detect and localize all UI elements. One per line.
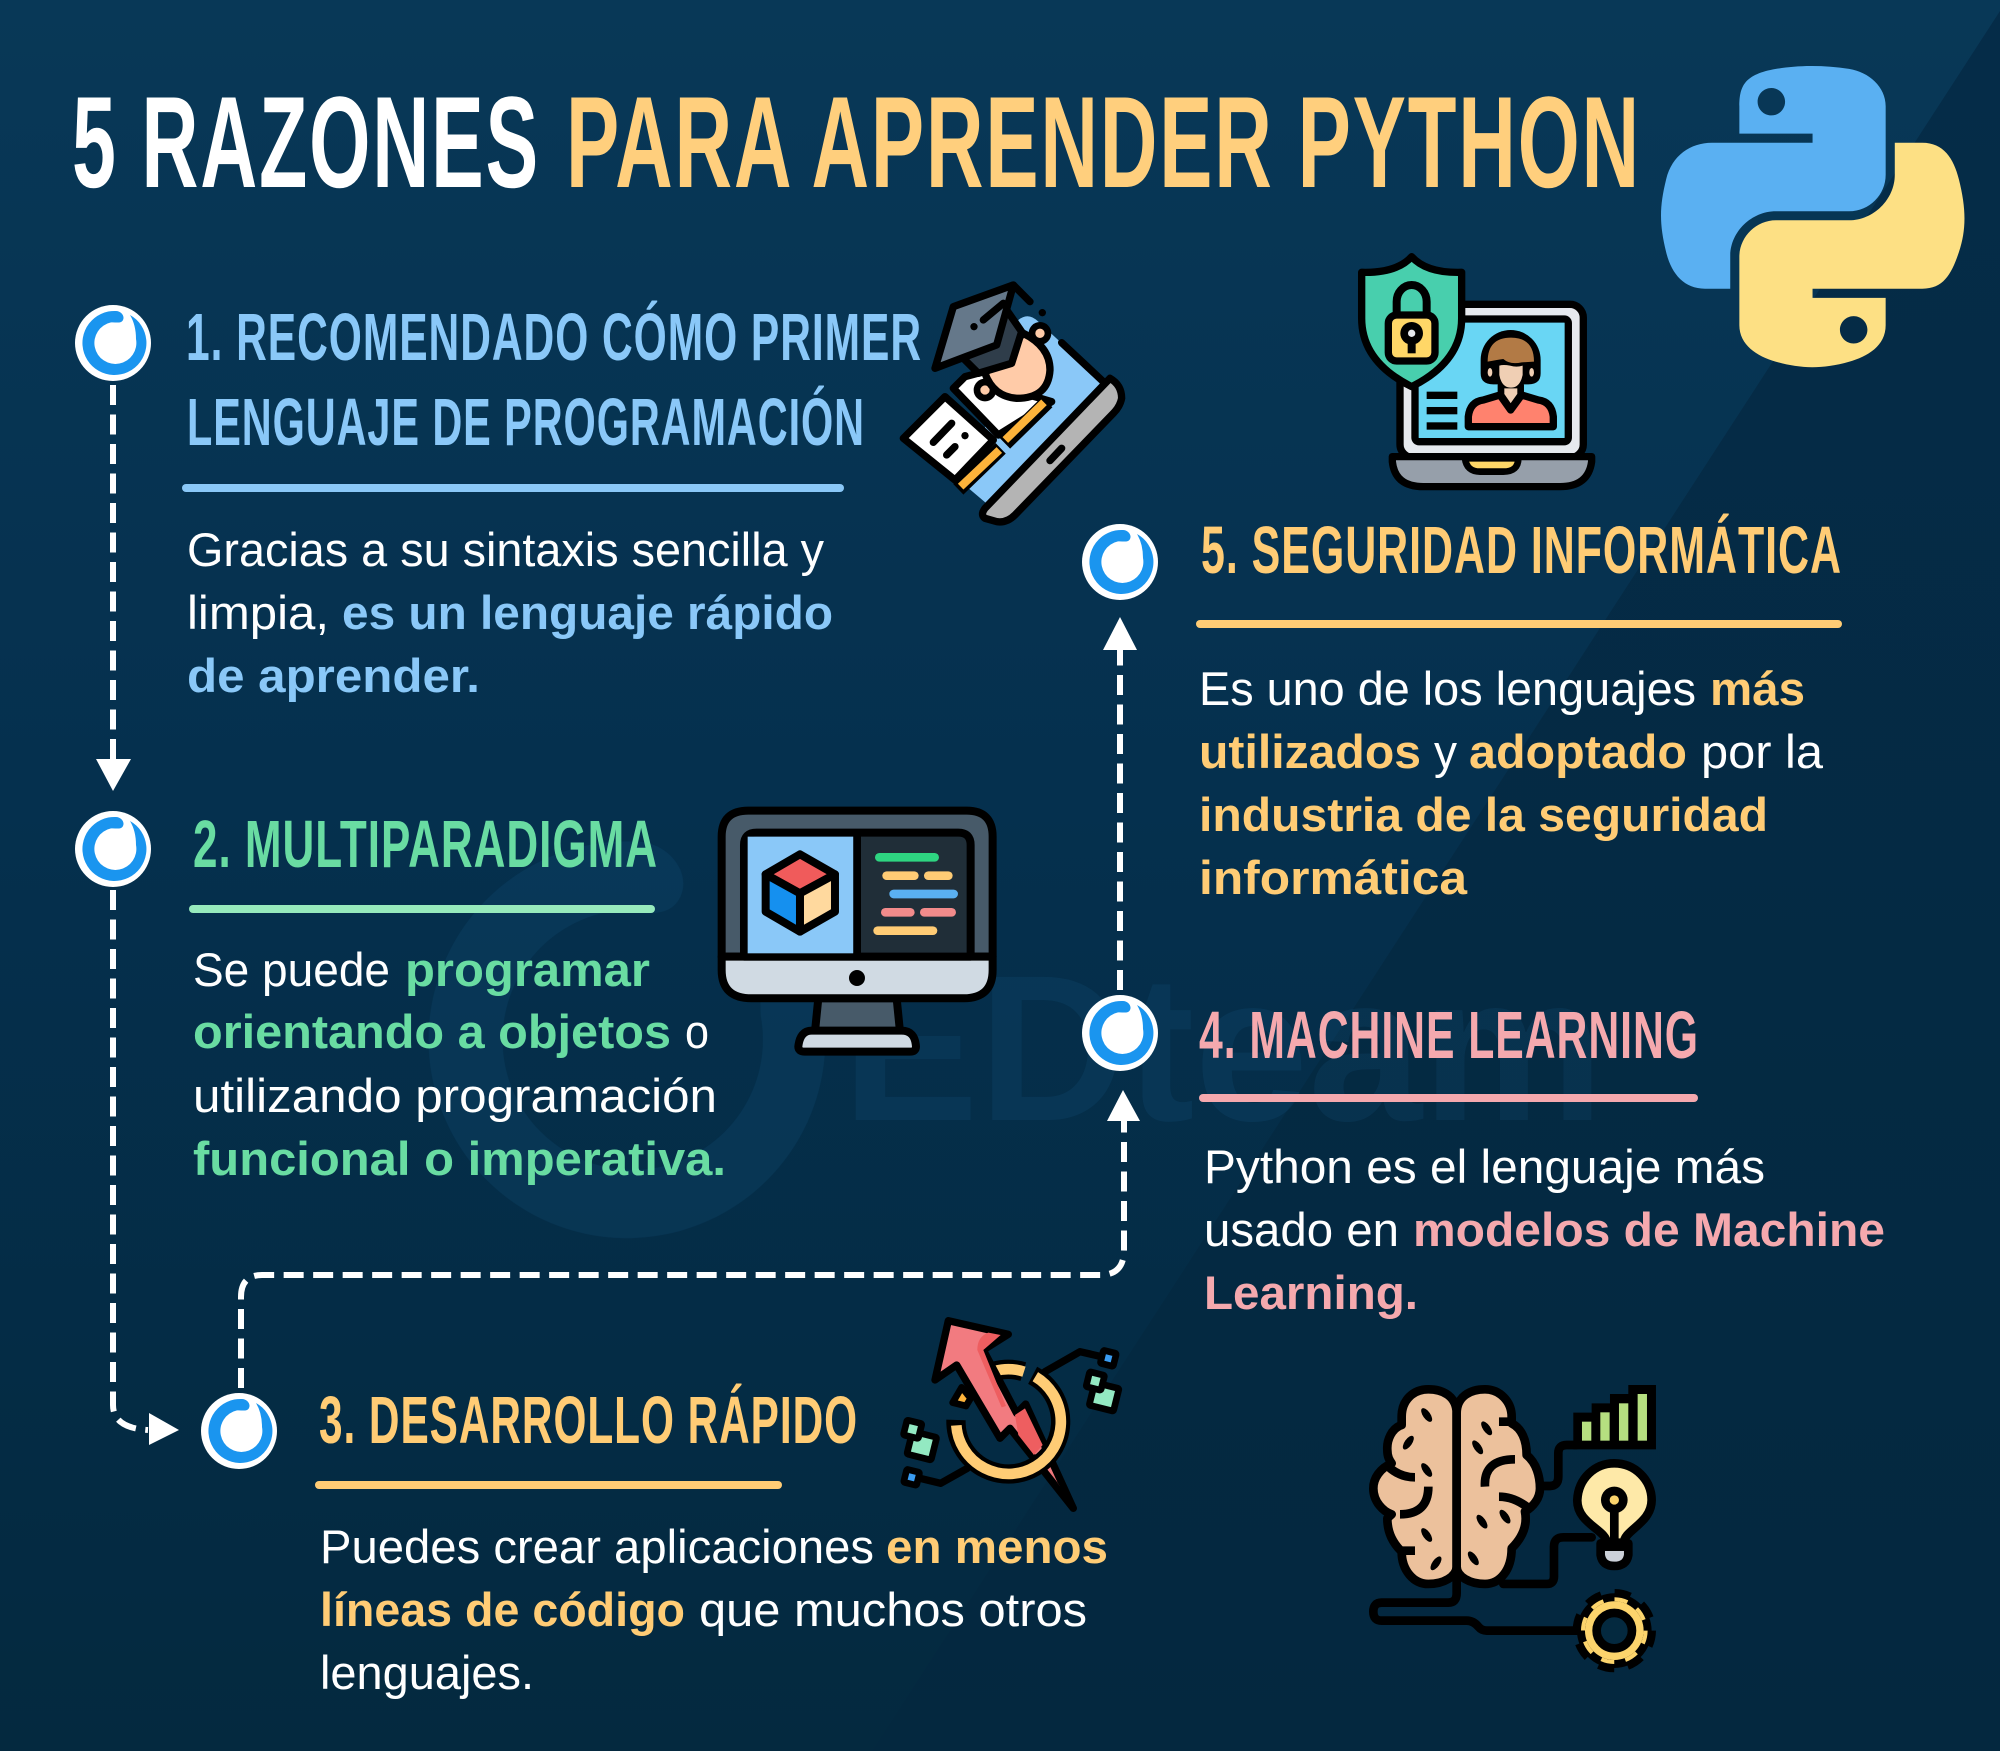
node marker 3 — [201, 1393, 277, 1469]
heading 3: 3. DESARROLLO RÁPIDO — [319, 1383, 858, 1458]
text 5: y — [1434, 725, 1457, 778]
watermark: EDteam logo — [429, 841, 1604, 1238]
text 1: de aprender. — [187, 649, 480, 702]
underline 1 — [182, 484, 844, 492]
text 4: Python es el lenguaje más — [1204, 1140, 1765, 1193]
heading 1: 1. RECOMENDADO CÓMO PRIMER — [186, 300, 922, 375]
text 1: limpia, — [187, 586, 329, 639]
text 2: programar — [405, 943, 650, 996]
text 5: Es uno de los lenguajes — [1199, 662, 1696, 715]
text 5: más — [1710, 662, 1805, 715]
text 4: modelos de Machine — [1413, 1203, 1885, 1256]
text 3: lenguajes. — [320, 1646, 534, 1699]
text 2 — [193, 943, 726, 1185]
text 2: utilizando programación — [193, 1069, 717, 1122]
underline 5 — [1196, 620, 1842, 628]
panel: step 5 — [1082, 257, 1842, 904]
text 2: o — [685, 1005, 709, 1058]
watermark: EDteam logo: EDteam — [842, 933, 1604, 1165]
arrow: step 2 to step 3 — [113, 890, 179, 1445]
node marker 1 — [75, 305, 151, 381]
title: 5 RAZONES — [72, 69, 540, 215]
text 5: adoptado — [1469, 725, 1687, 778]
text 2: orientando a objetos — [193, 1005, 671, 1058]
text 5: informática — [1199, 851, 1468, 904]
text 4: Learning. — [1204, 1266, 1418, 1319]
panel: step 2 — [75, 807, 993, 1185]
panel: step 1 — [75, 285, 1122, 702]
title — [72, 69, 1641, 215]
underline 3 — [315, 1481, 782, 1489]
underline 2 — [189, 905, 655, 913]
node marker 5 — [1082, 524, 1158, 600]
text 5: utilizados — [1199, 725, 1421, 778]
text 3: en menos — [886, 1520, 1108, 1573]
text 1: Gracias a su sintaxis sencilla y — [187, 523, 824, 576]
icon: monitor with code — [722, 811, 993, 1052]
panel: step 3 — [201, 1321, 1119, 1699]
text 2: funcional o imperativa. — [193, 1132, 726, 1185]
icon: brain with chart, bulb and gear — [1373, 1385, 1656, 1670]
arrow: step 4 to step 5 — [1103, 617, 1137, 990]
node marker 4 — [1082, 995, 1158, 1071]
heading 2: 2. MULTIPARADIGMA — [193, 807, 658, 882]
arrow: step 1 to step 2 — [96, 385, 131, 791]
icon: security shield and laptop — [1362, 257, 1592, 487]
icon: fast arrow and ring — [903, 1321, 1119, 1508]
icon: python logo — [1661, 66, 1964, 367]
text 5 — [1199, 662, 1824, 904]
text 2: Se puede — [193, 943, 390, 996]
text 1: es un lenguaje rápido — [342, 586, 833, 639]
text 4 — [1204, 1140, 1885, 1319]
node marker 2 — [75, 811, 151, 887]
text 3 — [320, 1520, 1108, 1699]
text 4: usado en — [1204, 1203, 1399, 1256]
text 3: que muchos otros — [699, 1583, 1087, 1636]
heading 1: LENGUAJE DE PROGRAMACIÓN — [187, 385, 865, 460]
panel: step 4 — [1082, 995, 1885, 1670]
heading 4: 4. MACHINE LEARNING — [1199, 998, 1699, 1073]
background diagonal shape — [872, 11, 2000, 1751]
text 3: Puedes crear aplicaciones — [320, 1520, 874, 1573]
text 5: industria de la seguridad — [1199, 788, 1768, 841]
underline 4 — [1199, 1094, 1698, 1102]
heading 1 — [186, 300, 922, 460]
text 3: líneas de código — [320, 1583, 685, 1636]
arrow: step 3 to step 4 — [241, 1090, 1140, 1388]
icon: graduation tablet — [903, 285, 1122, 522]
text 1 — [187, 523, 833, 702]
text 5: por la — [1701, 725, 1824, 778]
